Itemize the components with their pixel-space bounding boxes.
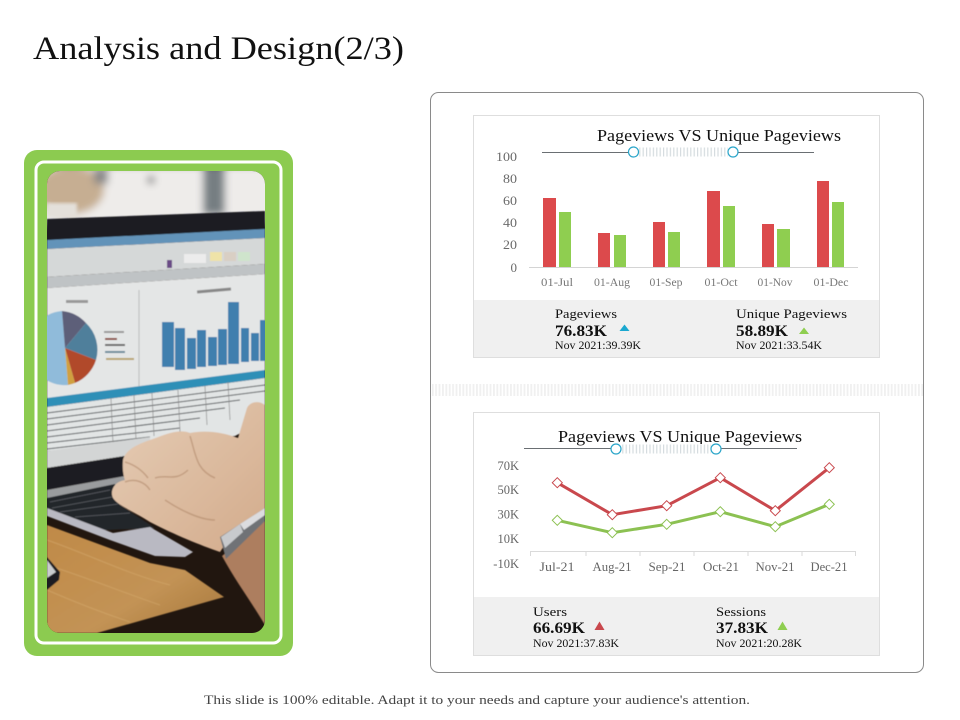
hand (112, 402, 265, 552)
y axis labels: 40 (503, 215, 517, 230)
panel: bar chart card (474, 116, 880, 358)
x axis labels: Nov-21 (756, 560, 794, 574)
y axis labels: 20 (503, 237, 517, 252)
stat: Users (533, 605, 620, 650)
spreadsheet table (47, 370, 265, 407)
x axis labels (540, 560, 848, 574)
stat: Unique Pageviews: Nov 2021:33.54K (736, 340, 823, 352)
footer note: This slide is 100% editable. Adapt it to your needs and capture your audience's attention. (204, 693, 750, 707)
x axis labels: 01-Dec (814, 275, 848, 289)
keyboard (47, 484, 155, 530)
panel: line chart card (474, 412, 880, 656)
footer strip (474, 300, 879, 357)
y axis labels: 100 (496, 149, 517, 164)
mouse (47, 557, 60, 590)
wooden desk (47, 525, 224, 633)
range slider (542, 147, 814, 158)
y axis labels: 60 (503, 193, 517, 208)
stat: Sessions (716, 605, 803, 650)
laptop edge (47, 508, 193, 557)
chart title: Pageviews VS Unique Pageviews (558, 427, 802, 446)
watch (220, 514, 265, 559)
footer strip (474, 597, 879, 655)
bar chart (529, 181, 858, 268)
x axis labels: Sep-21 (648, 560, 686, 574)
spreadsheet bar chart (162, 302, 266, 370)
panel: dashboards outline (430, 92, 924, 672)
stat: Users: Users (533, 605, 567, 619)
y axis labels: -10K (493, 557, 519, 571)
stat: Users: Nov 2021:37.83K (533, 638, 620, 650)
title: Analysis and Design(2/3) (33, 31, 404, 67)
stat: Unique Pageviews (736, 307, 847, 352)
y axis labels (496, 149, 517, 275)
x axis labels: 01-Aug (594, 275, 630, 289)
x axis labels: Jul-21 (540, 560, 574, 574)
stat: Unique Pageviews: 58.89K (736, 323, 788, 340)
y axis labels: 80 (503, 171, 517, 186)
x axis labels: Oct-21 (703, 560, 739, 574)
wrist (222, 520, 265, 625)
y axis labels: 70K (497, 459, 519, 473)
line chart (530, 463, 856, 556)
white inner outline (36, 162, 281, 643)
photo: hands on laptop showing a spreadsheet dashboard (47, 171, 265, 633)
x axis labels: Aug-21 (592, 560, 632, 574)
range slider (524, 444, 797, 454)
screen bezel (47, 211, 265, 240)
y axis labels (493, 459, 519, 571)
stat: Pageviews (555, 307, 642, 352)
stat: Sessions: Nov 2021:20.28K (716, 638, 803, 650)
y axis labels: 50K (497, 483, 519, 497)
knuckle shading (125, 436, 215, 520)
spreadsheet pie chart (47, 310, 98, 386)
stat: Unique Pageviews: Unique Pageviews (736, 307, 847, 321)
stat: Pageviews: 76.83K (555, 323, 607, 340)
x axis labels: Dec-21 (810, 560, 848, 574)
y axis labels: 10K (497, 532, 519, 546)
x axis labels: 01-Nov (758, 275, 792, 289)
green frame (24, 150, 293, 656)
y axis labels: 30K (497, 508, 519, 522)
y axis labels: 0 (510, 260, 517, 275)
x axis labels: 01-Oct (704, 275, 738, 289)
stat: Pageviews: Nov 2021:39.39K (555, 340, 642, 352)
chart title: Pageviews VS Unique Pageviews (597, 126, 841, 145)
stat: Pageviews: Pageviews (555, 307, 617, 321)
x axis labels: 01-Sep (650, 275, 682, 289)
stat: Users: 66.69K (533, 620, 585, 637)
x axis labels: 01-Jul (541, 275, 574, 289)
panel: photo frame (24, 150, 293, 656)
x axis labels (541, 275, 848, 289)
stat: Sessions: 37.83K (716, 620, 768, 637)
divider band (432, 384, 923, 396)
stat: Sessions: Sessions (716, 605, 766, 619)
